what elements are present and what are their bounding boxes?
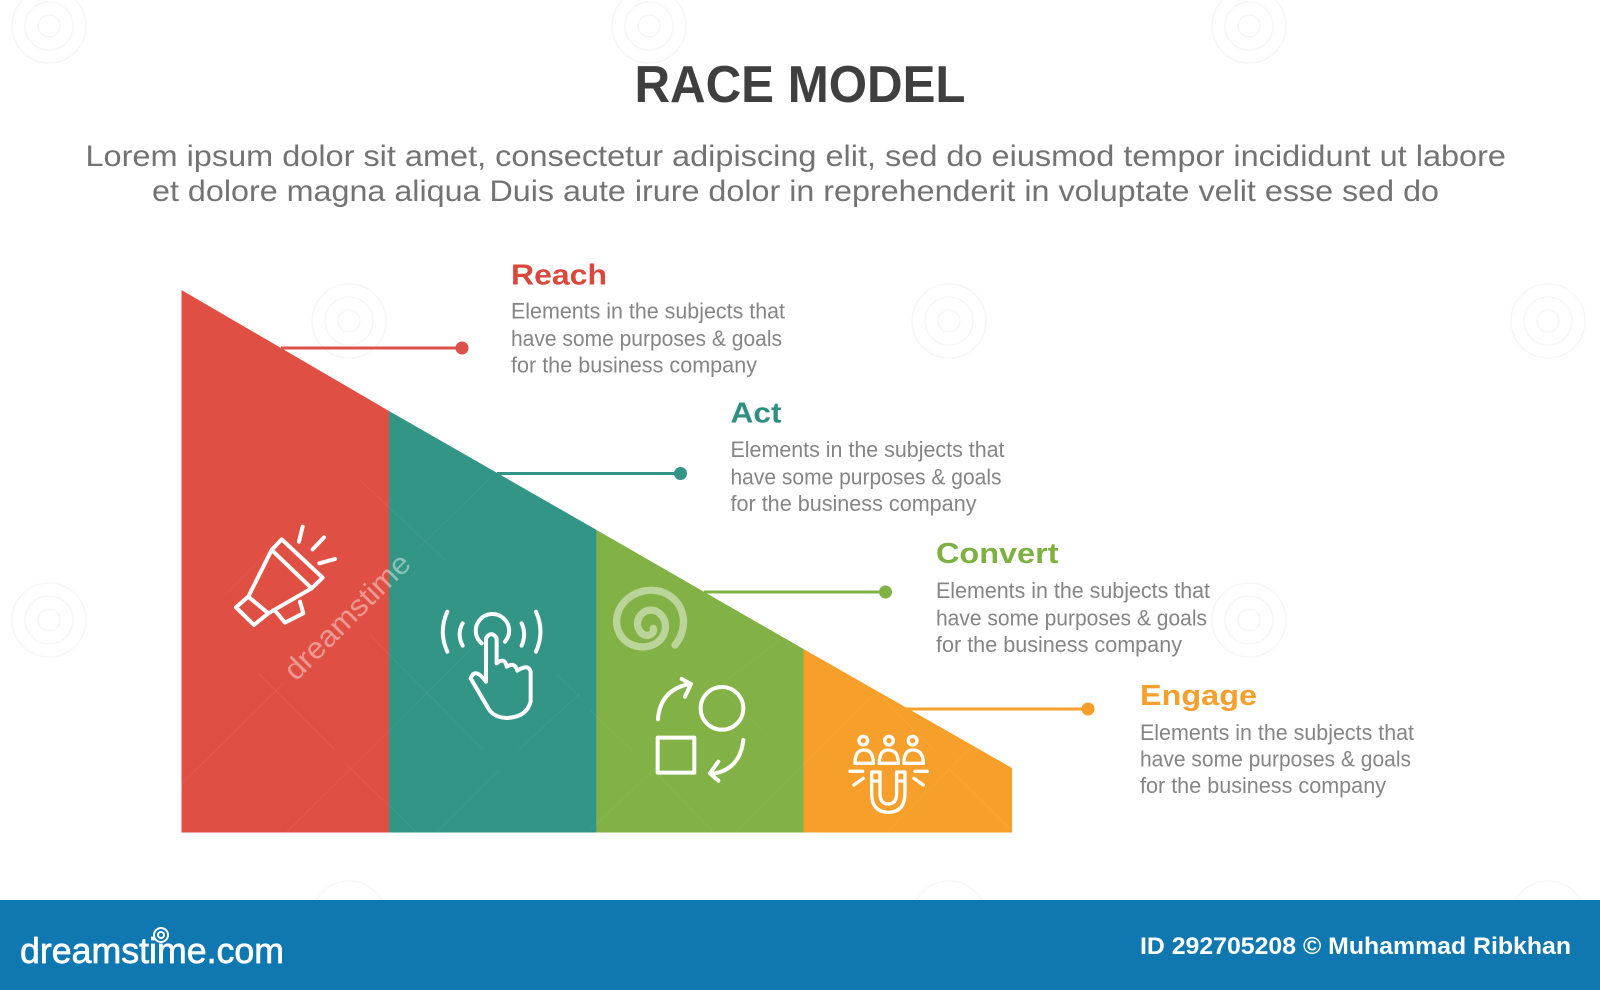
subtitle text: Lorem ipsum dolor sit amet, consectetur adipiscing elit, sed do eiusmod tempor incididunt ut labore: [86, 140, 1506, 173]
text: reach: for the business company: [511, 352, 757, 378]
text: act: for the business company: [730, 491, 976, 516]
callout: engage: [906, 680, 1414, 798]
icon: people magnet: [850, 736, 927, 812]
segment: reach: [182, 290, 389, 832]
text: convert: for the business company: [936, 632, 1182, 657]
segment: act: [389, 411, 597, 832]
connector: engage: [906, 702, 1094, 716]
connector: act: [497, 467, 687, 480]
icon: convert shapes: [658, 679, 743, 781]
connector: convert: [704, 586, 892, 598]
subtitle text: [86, 140, 1506, 208]
text: engage: Elements in the subjects that: [1140, 720, 1414, 745]
footer credit: ID 292705208 © Muhammad Ribkhan: [1140, 933, 1571, 960]
connector: reach: [281, 342, 468, 354]
segment: engage: [804, 649, 1012, 832]
text: engage: have some purposes & goals: [1140, 746, 1411, 772]
heading: engage: Engage: [1140, 680, 1257, 712]
text: act: [730, 437, 1004, 516]
text: engage: [1140, 720, 1414, 798]
text: convert: have some purposes & goals: [936, 606, 1207, 630]
text: engage: for the business company: [1140, 773, 1386, 798]
stepped triangle chart: [182, 290, 1012, 832]
footer logo: dreamstime.com: [20, 930, 284, 971]
text: act: Elements in the subjects that: [730, 437, 1004, 462]
heading: convert: Convert: [936, 538, 1059, 570]
callout: convert: [704, 538, 1210, 657]
heading: reach: Reach: [511, 260, 607, 292]
text: convert: [936, 578, 1210, 657]
watermark: spiral: [617, 590, 684, 647]
segment: convert: [597, 530, 804, 832]
heading: act: Act: [730, 398, 782, 430]
text: reach: [511, 298, 785, 378]
watermark: dreamstime: dreamstime: [278, 547, 418, 687]
footer bar: [0, 900, 1600, 990]
logo spiral: [154, 928, 168, 942]
text: convert: Elements in the subjects that: [936, 578, 1210, 603]
title: RACE MODEL: [634, 56, 966, 114]
callout: act: [497, 398, 1004, 516]
icon: megaphone: [236, 527, 335, 625]
callout: reach: [281, 260, 785, 378]
icon: tap hand: [443, 612, 540, 718]
subtitle text: et dolore magna aliqua Duis aute irure dolor in reprehenderit in voluptate velit esse sed do: [152, 175, 1439, 208]
text: act: have some purposes & goals: [730, 464, 1002, 490]
text: reach: have some purposes & goals: [511, 326, 782, 351]
text: reach: Elements in the subjects that: [511, 298, 785, 324]
